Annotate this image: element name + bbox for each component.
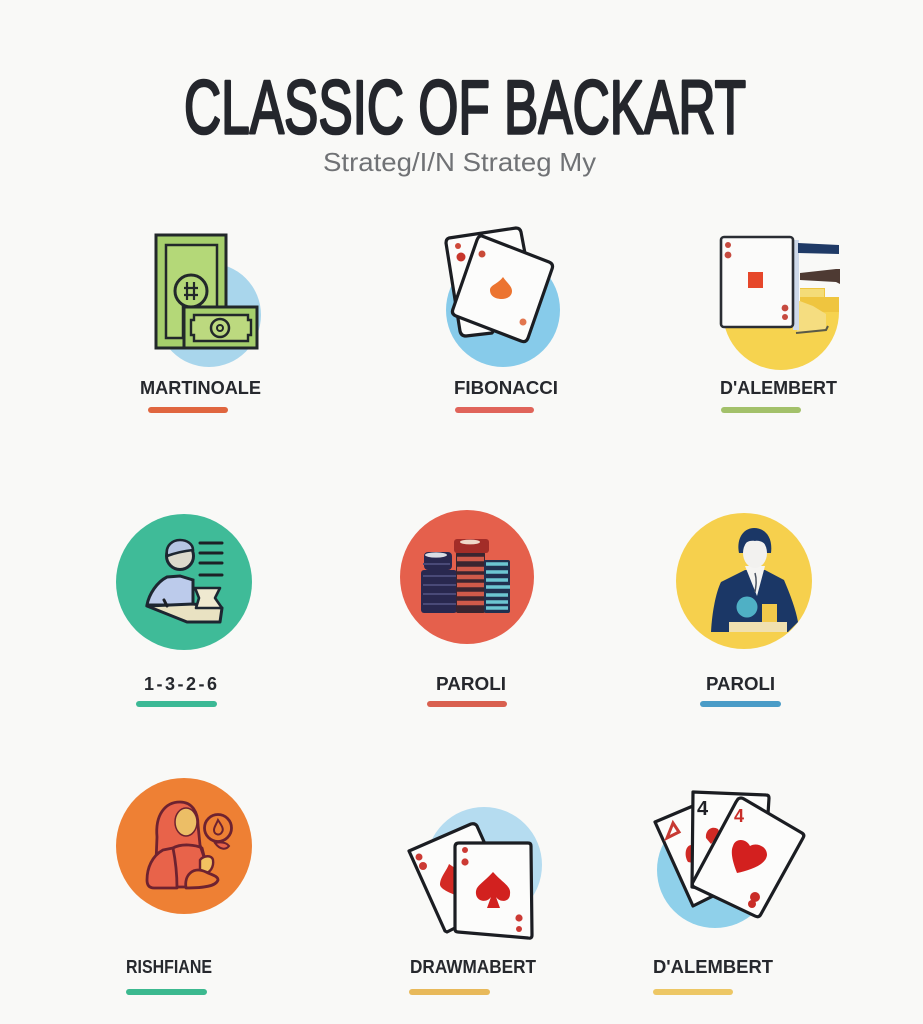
- label: 1-3-2-6: [144, 674, 217, 694]
- icon: card with bars on yellow circle: [721, 237, 840, 370]
- icon: two cards on blue circle: [446, 228, 560, 367]
- panel: two spade cards: [409, 807, 542, 995]
- icon: chip stacks on red circle: [400, 510, 534, 644]
- panel: martingale: [140, 235, 261, 413]
- icon: man in suit on yellow circle: [676, 513, 812, 649]
- subtitle: Strateg/I/N Strateg My: [323, 147, 596, 177]
- icon: hooded figure on orange circle: [116, 778, 252, 914]
- accent bar: [136, 701, 217, 707]
- label: D'ALEMBERT: [720, 378, 837, 398]
- panel: paroli dealer: [676, 513, 812, 707]
- accent bar: [148, 407, 228, 413]
- label: RISHFIANE: [126, 957, 212, 977]
- accent bar: [653, 989, 733, 995]
- panel: risk: [116, 778, 252, 995]
- label: MARTINOALE: [140, 378, 261, 398]
- accent bar: [409, 989, 490, 995]
- accent bar: [427, 701, 507, 707]
- accent bar: [126, 989, 207, 995]
- icon: fan of cards on blue circle: 4: [734, 806, 744, 826]
- label: D'ALEMBERT: [653, 957, 773, 977]
- icon: cards on blue circle: [409, 807, 542, 938]
- label: DRAWMABERT: [410, 957, 536, 977]
- accent bar: [721, 407, 801, 413]
- accent bar: [455, 407, 534, 413]
- icon: person with list on green circle: [116, 514, 252, 650]
- label: PAROLI: [706, 674, 775, 694]
- panel: three heart cards: [653, 792, 804, 995]
- panel: d'alembert: [720, 237, 840, 413]
- icon: fan of cards on blue circle: 4: [697, 798, 709, 820]
- icon: banknotes: [156, 235, 261, 367]
- panel: 1-3-2-6: [116, 514, 252, 707]
- accent bar: [700, 701, 781, 707]
- panel: paroli chips: [400, 510, 534, 707]
- label: PAROLI: [436, 674, 506, 694]
- icon: fan of cards on blue circle: [655, 792, 804, 928]
- label: FIBONACCI: [454, 378, 558, 398]
- panel: fibonacci: [446, 228, 560, 413]
